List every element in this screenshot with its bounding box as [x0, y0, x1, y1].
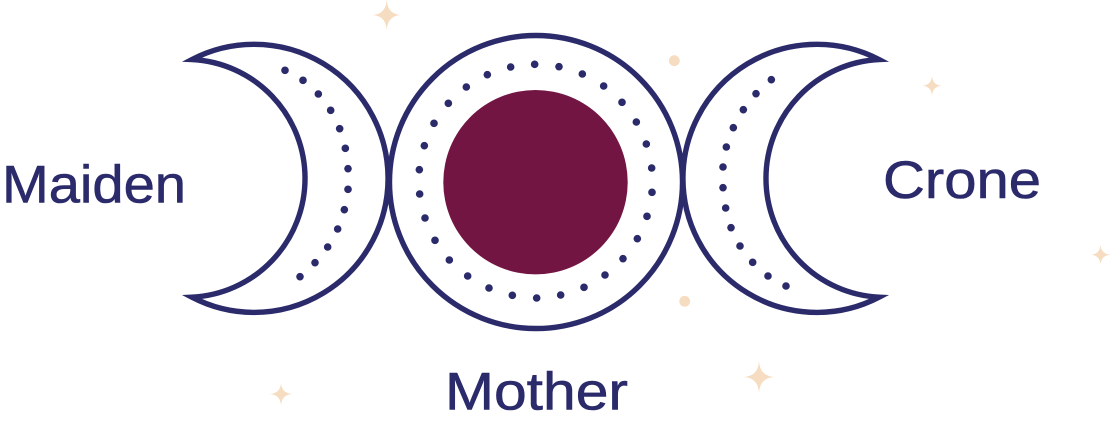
full moon dot ring: [416, 61, 656, 302]
crescent dots: [719, 76, 790, 290]
icon: star far right: [1091, 245, 1110, 264]
icon: peach dot lower: [679, 296, 690, 307]
waxing crescent moon: [192, 44, 388, 312]
full moon: [390, 36, 682, 328]
icon: star top centre: [373, 0, 401, 30]
crescent outline: [683, 44, 879, 312]
label: Maiden: Maiden: [2, 156, 186, 214]
icon: star bottom left: [270, 383, 292, 406]
waning crescent moon: [683, 44, 879, 312]
icon: peach dot upper: [669, 55, 680, 66]
icon: star bottom right: [744, 361, 774, 393]
label: Mother: Mother: [445, 362, 628, 422]
full moon outline: [390, 36, 682, 328]
label: Crone: Crone: [883, 151, 1041, 210]
full moon disc: [443, 90, 628, 274]
crescent outline: [192, 44, 388, 312]
crescent dots: [281, 67, 352, 280]
icon: star top right: [922, 76, 942, 96]
